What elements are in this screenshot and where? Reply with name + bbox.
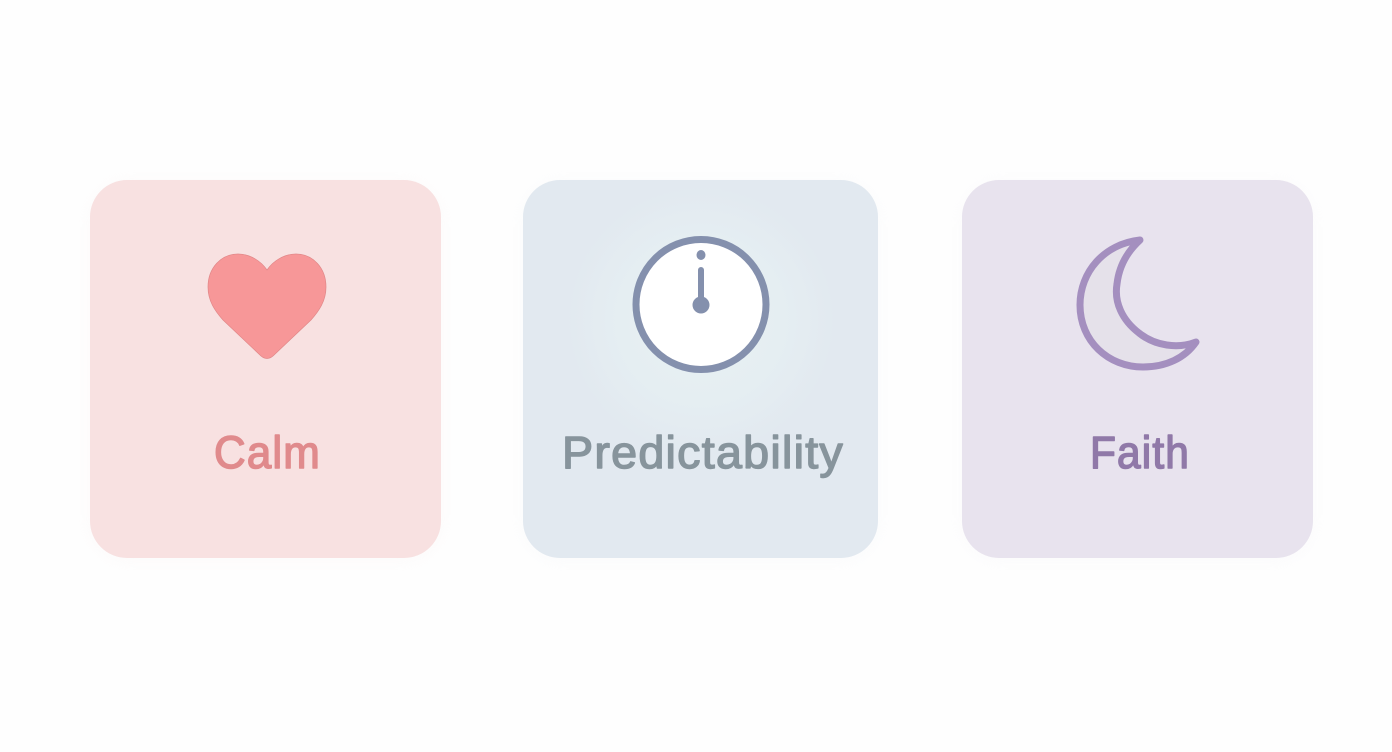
icon: clock bbox=[636, 240, 767, 370]
panel: Calm bbox=[88, 180, 443, 562]
icon: heart bbox=[208, 254, 326, 358]
panel: Predictability bbox=[521, 180, 880, 562]
heading: Calm: Calm bbox=[214, 427, 321, 478]
heading: Faith: Faith bbox=[1090, 427, 1190, 478]
panel: Faith bbox=[960, 180, 1315, 562]
icon: crescent moon bbox=[1080, 240, 1196, 367]
heading: Predictability: Predictability bbox=[562, 427, 844, 478]
